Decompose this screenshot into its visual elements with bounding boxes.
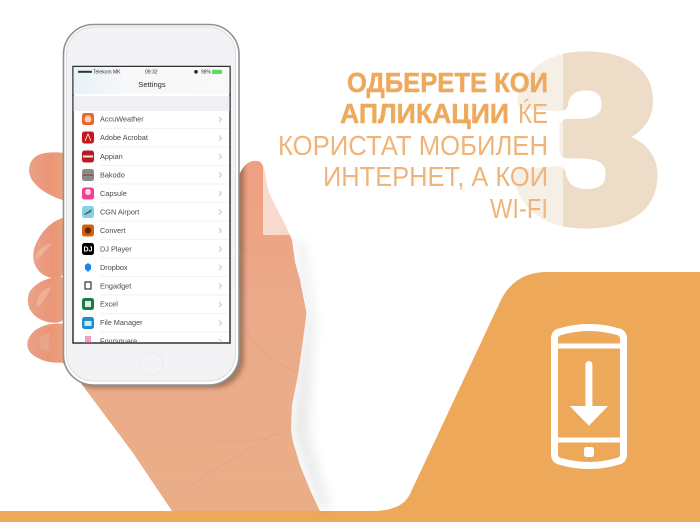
settings title: Settings [138,80,166,89]
big numeral 3 [514,51,658,229]
orange panel with bottom band [0,272,700,522]
status bar: Telekom MK [93,70,121,76]
heading line 4: ИНТЕРНЕТ, А КОИ [323,161,548,192]
middle finger [33,217,68,278]
status bar: 98% [201,70,212,76]
heading line 5: WI-FI [490,193,548,224]
little finger [27,324,66,363]
palm and thumb [60,161,320,511]
heading line 2 bold: АПЛИКАЦИИ [340,98,509,129]
status bar [78,70,222,74]
hand shadow [292,240,330,510]
white veil over thumb [263,155,308,235]
row: Bakodo [82,169,125,181]
icon: phone with download arrow [554,328,624,466]
row chevrons [219,117,222,344]
heading line 2 light: ЌЕ [518,98,548,129]
heading line 3: КОРИСТАТ МОБИЛЕН [278,130,548,161]
heading line 1: ОДБЕРЕТЕ КОИ [347,67,548,98]
smartphone [64,24,239,385]
row: Bakodo: Bakodo [100,170,125,180]
row: AccuWeather: AccuWeather [100,114,144,124]
row: DJ Player [82,243,132,255]
row: Convert [82,224,126,236]
navigation header [73,67,230,94]
row: Foursquare [85,336,137,342]
row separators [100,128,229,332]
phone shadow on hand [81,164,247,391]
row: CGN Airport: CGN Airport [100,208,139,216]
row: Excel: Excel [100,300,118,308]
grey section band [73,96,230,111]
row: File Manager [82,317,143,329]
ring finger [28,277,69,323]
home button [139,352,163,376]
row: CGN Airport [82,206,139,218]
row: Excel [82,298,118,310]
status bar: 09:32 [145,70,158,76]
row: Engadget: Engadget [100,282,131,290]
row: Capsule [82,188,127,200]
row: Appian: Appian [100,152,123,161]
row: AccuWeather [82,113,144,125]
row: DJ Player: DJ Player [100,244,132,254]
phone body [64,24,239,385]
ring fingernail [37,287,52,306]
row: Appian [82,150,123,162]
row: Dropbox [85,263,128,272]
app rows [82,113,148,346]
big numeral 3: 3 [516,11,659,268]
big numeral 3: 3 [516,11,659,268]
phone front face [66,27,236,381]
screen [73,66,230,346]
row: Engadget [85,282,131,290]
row: Foursquare: Foursquare [100,336,137,346]
row: Dropbox: Dropbox [100,263,128,272]
middle fingernail [35,243,53,259]
row: Adobe Acrobat [82,132,148,144]
row: Convert: Convert [100,226,126,235]
palm creases [172,246,296,505]
row: Adobe Acrobat: Adobe Acrobat [100,133,148,142]
row: DJ Player: DJ [84,247,93,254]
heading text [278,67,548,224]
row: File Manager: File Manager [100,318,143,327]
little fingernail [39,333,50,351]
row: Capsule: Capsule [100,189,127,198]
index finger [29,152,66,201]
hand holding the phone [27,152,320,511]
